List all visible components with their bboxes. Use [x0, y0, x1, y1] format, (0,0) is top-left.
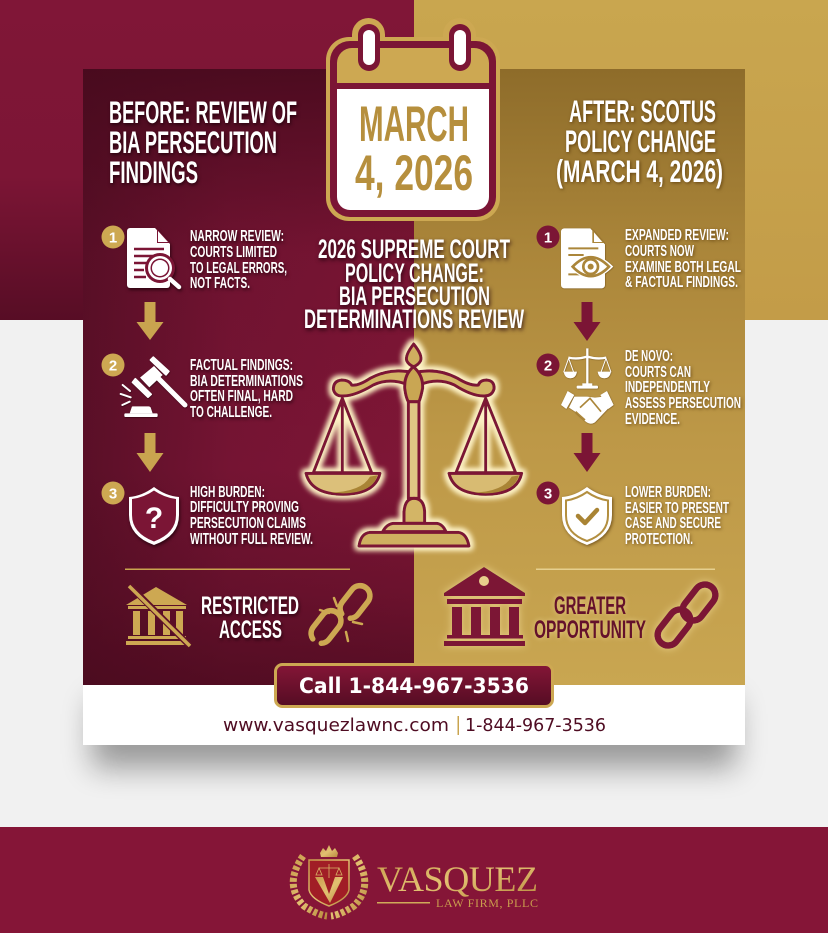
upper base [383, 523, 446, 532]
step 2 left: factual findings [102, 354, 303, 421]
icon: document with eye [561, 228, 613, 288]
emblem: shield [309, 860, 349, 906]
heading: after: POLICY CHANGE [565, 123, 716, 159]
calendar date: 4, 2026 [355, 145, 473, 201]
text: lower burden: CASE AND SECURE [625, 515, 721, 532]
heading: before: BEFORE: REVIEW OF [109, 94, 297, 130]
icon: gavel [121, 357, 185, 417]
icon: scales and handshake [561, 348, 614, 424]
number badge 1: 1 [109, 230, 117, 246]
heading: before: BIA PERSECUTION [109, 124, 277, 160]
text: narrow review: TO LEGAL ERRORS, [190, 260, 287, 277]
text: expanded review [625, 227, 741, 291]
panel: before (left) [83, 69, 414, 685]
central scales of justice [306, 344, 522, 546]
number badge 2: 2 [109, 358, 117, 374]
heading: after: AFTER: SCOTUS [569, 93, 716, 129]
text: narrow review: COURTS LIMITED [190, 244, 277, 261]
heading: after: (MARCH 4, 2026) [556, 153, 723, 189]
text: factual findings: FACTUAL FINDINGS: [190, 357, 293, 374]
emblem: crown [320, 845, 338, 857]
center title: POLICY CHANGE: [345, 258, 484, 288]
number badge 3 [102, 482, 124, 504]
number badge 3: 3 [544, 486, 552, 502]
divider left [125, 568, 350, 570]
icon: shield with check [562, 487, 612, 545]
text: expanded review: EXAMINE BOTH LEGAL [625, 259, 741, 276]
column foot [404, 498, 425, 523]
calendar icon [326, 18, 500, 221]
text: de novo: INDEPENDENTLY [625, 379, 710, 396]
label: restricted access: ACCESS [219, 616, 282, 644]
number badge 1 [102, 226, 124, 248]
text: lower burden: PROTECTION. [625, 531, 693, 548]
website and phone [223, 715, 606, 736]
step 2 right: de novo [536, 348, 741, 428]
heading: before [109, 94, 297, 190]
icon: document with magnifier [127, 228, 179, 288]
tagline: LAW FIRM, PLLC [436, 896, 538, 910]
center knob [405, 367, 423, 402]
text: high burden: DIFFICULTY PROVING [190, 499, 299, 516]
text: de novo: ASSESS PERSECUTION [625, 395, 741, 412]
website and phone: 1-844-967-3536 [465, 715, 606, 736]
emblem: laurel wreath [293, 856, 365, 916]
arrow: right 1 to 2 [574, 302, 600, 341]
text: de novo [625, 348, 741, 428]
number badge 3: 3 [109, 486, 117, 502]
text: de novo: EVIDENCE. [625, 411, 680, 428]
beam [333, 371, 494, 396]
text: expanded review: COURTS NOW [625, 243, 694, 260]
number badge 1: 1 [544, 230, 552, 246]
heading: before: FINDINGS [109, 154, 198, 190]
center title: 2026 SUPREME COURT [318, 234, 510, 264]
left pan strings [313, 398, 372, 473]
pole [408, 402, 419, 498]
left pan [306, 473, 380, 494]
text: high burden: HIGH BURDEN: [190, 484, 265, 501]
step 1 right: expanded review [536, 226, 741, 291]
contact strip [83, 685, 745, 745]
text: expanded review: & FACTUAL FINDINGS. [625, 274, 738, 291]
call button: Call 1-844-967-3536 [299, 674, 529, 698]
text: expanded review: EXPANDED REVIEW: [625, 227, 729, 244]
heading: after [556, 93, 723, 189]
calendar date [355, 96, 473, 201]
footer band [0, 827, 828, 933]
icon: shield with question mark: ? [145, 502, 163, 535]
icon: courthouse [444, 567, 525, 646]
label: restricted access: RESTRICTED [201, 592, 299, 620]
calendar date: MARCH [359, 96, 469, 152]
icon: shield with question mark [129, 487, 179, 545]
text: lower burden: EASIER TO PRESENT [625, 500, 729, 517]
text: lower burden: LOWER BURDEN: [625, 484, 711, 501]
center title: DETERMINATIONS REVIEW [304, 304, 524, 334]
step 3 left: high burden [102, 482, 313, 548]
text: narrow review: NARROW REVIEW: [190, 228, 284, 245]
text: de novo: COURTS CAN [625, 364, 691, 381]
text: lower burden [625, 484, 729, 548]
lower base [359, 532, 469, 546]
finial [406, 344, 421, 367]
number badge 3 [536, 482, 560, 504]
right pan strings [456, 398, 516, 473]
text: high burden [190, 484, 313, 548]
call button [276, 664, 552, 706]
text: factual findings: TO CHALLENGE. [190, 404, 272, 421]
logo: vasquez law firm [293, 845, 538, 916]
text: de novo: DE NOVO: [625, 348, 673, 365]
label: restricted access [201, 592, 299, 644]
icon: crossed-out courthouse [126, 586, 190, 646]
text: factual findings [190, 357, 303, 421]
text: narrow review [190, 228, 287, 292]
label: greater opportunity [534, 592, 646, 644]
number badge 2 [536, 354, 560, 376]
icon: broken chain [307, 582, 374, 647]
number badge 2 [102, 354, 124, 376]
arrow: right 2 to 3 [574, 433, 600, 472]
text: high burden: WITHOUT FULL REVIEW. [190, 531, 313, 548]
text: factual findings: BIA DETERMINATIONS [190, 373, 303, 390]
panel: after (right) [414, 69, 745, 685]
arrow: left 2 to 3 [136, 433, 164, 472]
card drop shadow [92, 700, 736, 768]
number badge 2: 2 [544, 358, 552, 374]
text: factual findings: OFTEN FINAL, HARD [190, 388, 293, 405]
text: narrow review: NOT FACTS. [190, 275, 250, 292]
arrow: left 1 to 2 [136, 302, 164, 340]
text: high burden: PERSECUTION CLAIMS [190, 515, 306, 532]
wordmark: VASQUEZ [377, 859, 538, 899]
step 3 right: lower burden [536, 482, 729, 548]
website and phone: www.vasquezlawnc.com [223, 715, 449, 736]
divider right [536, 568, 715, 570]
right pan [449, 473, 522, 494]
label: greater opportunity: GREATER [554, 592, 626, 620]
center title: BIA PERSECUTION [339, 281, 490, 311]
label: greater opportunity: OPPORTUNITY [534, 616, 646, 644]
step 1 left: narrow review [102, 226, 287, 292]
icon: linked chain [653, 580, 720, 650]
number badge 1 [536, 226, 560, 248]
center title [304, 234, 524, 334]
